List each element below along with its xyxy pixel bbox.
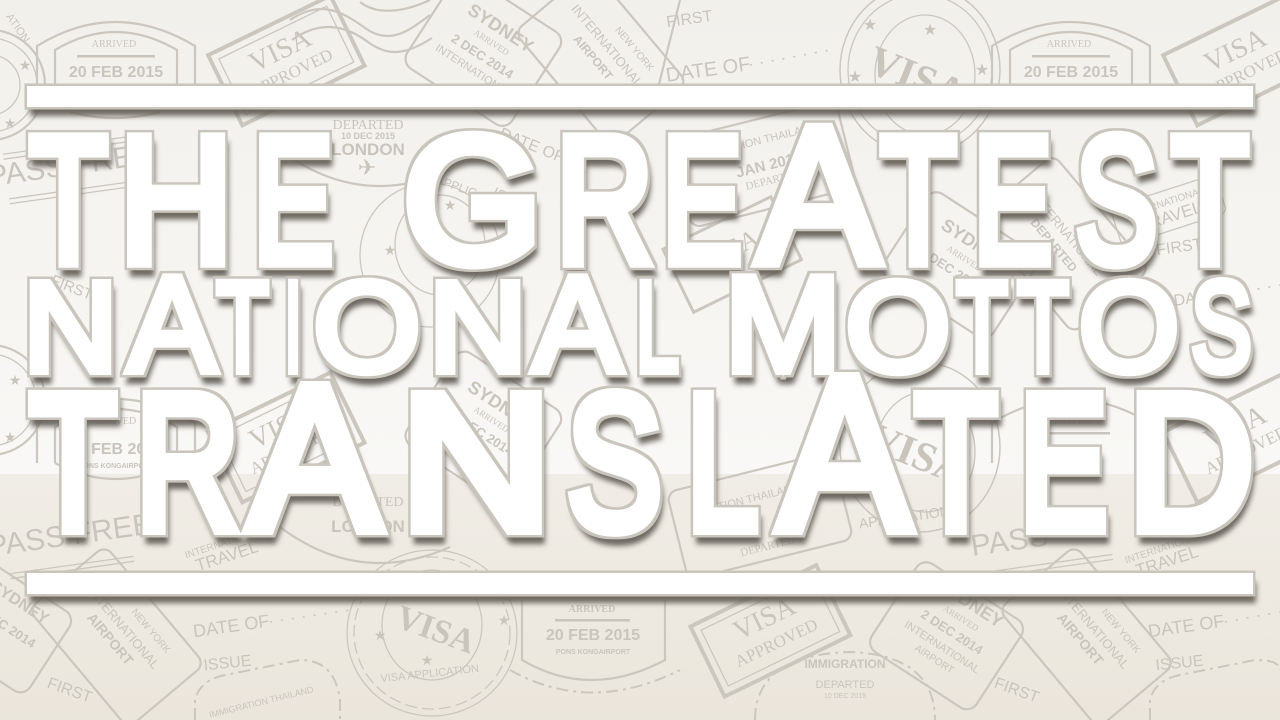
- stamp: visa approved right repeat: VISA: [1199, 399, 1272, 456]
- stamp: lower passport right: [968, 511, 1113, 579]
- stamp: visa approved repeat: APPROVED: [247, 422, 336, 478]
- stamp: international airport: [514, 0, 687, 147]
- title line 1: H: [119, 100, 233, 301]
- stamp: bottom issue left: IMMIGRATION THAILAND: [208, 684, 315, 720]
- stamp: visa round left: ★: [4, 115, 16, 131]
- stamp: arrived 20 Feb: [37, 22, 195, 118]
- stamp: bottom Sydney right: SYDNEY: [934, 575, 1007, 632]
- stamp: arrived repeat: PONS KONGAIRPORT: [79, 463, 154, 470]
- title line 1: [29, 87, 1249, 304]
- stamp: departed London: 10 DEC 2015: [341, 131, 395, 141]
- stamp: visa round middle: ★: [444, 197, 456, 213]
- stamp: bottom arrived: [510, 600, 680, 692]
- title line 2: A: [128, 248, 216, 400]
- stamp: Sydney repeat: 2 DEC 2014: [449, 408, 517, 459]
- title line 1: T: [1171, 100, 1249, 301]
- title line 3: L: [687, 354, 758, 570]
- stamp: departed London: LONDON: [331, 140, 405, 159]
- stamp: visa approved right: VISA: [1199, 22, 1272, 79]
- title line 2: L: [636, 256, 679, 399]
- stamp: immigration Thailand: JAN 2013: [734, 149, 804, 182]
- stamp: bottom airport left: INTERNATIONAL: [85, 583, 163, 672]
- stamp: visa round top: [840, 0, 1000, 155]
- stamp: Sydney: INTERNATIONAL: [433, 42, 513, 100]
- stamp: lower international travel right: INTERNATIONAL: [1124, 531, 1203, 566]
- stamp: international travel: TRAVEL: [1137, 197, 1204, 235]
- title line 2: T: [1017, 256, 1069, 399]
- stamp: date of: FIRST: [665, 8, 714, 31]
- stamp: bottom arrived: PONS KONGAIRPORT: [556, 649, 631, 656]
- stamp: bottom airport right: NEW YORK: [1099, 607, 1142, 656]
- stamp: arrived repeat: [37, 399, 195, 479]
- stamp: bottom date of left: FIRST: [45, 675, 94, 707]
- title line 2: A: [533, 248, 622, 400]
- stamp: bottom date of right: [992, 611, 1280, 707]
- stamp: bottom airport left: AIRPORT: [84, 610, 137, 668]
- stamp: visa round middle: ★: [384, 242, 396, 258]
- stamp: bottom visa round: ★: [498, 612, 510, 628]
- stamp: bottom immigration: IMMIGRATION: [804, 657, 886, 671]
- stamp: bottom date of left: DATE OF: [192, 611, 271, 641]
- stamp: visa round middle: APPLIC: [434, 172, 479, 200]
- stamp: arrived right repeat: ARRIVED: [1047, 416, 1091, 427]
- title line 1: E: [973, 100, 1052, 301]
- stamp: date of and issue: [490, 125, 567, 218]
- stamp: bottom date of right: FIRST: [992, 675, 1041, 707]
- stamp: bottom issue right: ISSUE: [1155, 653, 1204, 674]
- stamp: date of: DATE OF: [664, 53, 752, 87]
- title line 2: I: [284, 256, 302, 399]
- stamp: immigration lower: [667, 451, 853, 580]
- stamp: bottom airport left: [28, 545, 205, 720]
- stamp: visa approved: APPROVED: [247, 45, 336, 101]
- stamp: bottom Sydney right: ARRIVED: [941, 603, 981, 634]
- stamp: Sydney repeat: SYDNEY: [464, 377, 537, 434]
- stamp: bottom Sydney right: 2 DEC 2014: [918, 606, 986, 658]
- stamp: first and date right: FIRST: [1155, 236, 1204, 259]
- stamp: arrived 20 Feb: ARRIVED: [92, 39, 136, 50]
- stamp: bottom immigration: DEPARTED: [816, 679, 874, 691]
- stamp: visa lower-left of row two: [663, 197, 801, 312]
- stamp: visa round left: ATION: [3, 11, 32, 45]
- stamp: bottom arrived: 20 FEB 2015: [546, 627, 640, 644]
- stamp: first and date right: DATE: [1173, 287, 1216, 310]
- stamp: arrived repeat: 20 FEB 2015: [69, 441, 163, 458]
- title line 1: E: [253, 100, 333, 301]
- stamp: bottom visa round: VISA: [391, 599, 481, 662]
- stamp: immigration Thailand: IMMIGRATION THAILAND: [688, 121, 818, 164]
- stamp: bottom date of right: DATE OF: [1147, 611, 1226, 641]
- stamp: arrived right repeat: [992, 399, 1150, 463]
- title line 2: T: [216, 256, 269, 399]
- stamp: arrived right: ARRIVED: [1047, 39, 1091, 50]
- stamp: Sydney repeat: ARRIVED: [472, 404, 511, 435]
- stamp: bottom Sydney right: INTERNATIONAL: [902, 619, 982, 676]
- title line 3: T: [30, 354, 116, 570]
- title block with rules and shadow: [23, 86, 1254, 594]
- stamp: immigration lower: DEPARTED: [739, 534, 796, 559]
- stamp: departed London: [280, 118, 450, 186]
- stamp: lower London: LONDON: [331, 517, 405, 536]
- stamp: date of and issue: ISSUE: [490, 184, 535, 218]
- title line 2: M: [724, 248, 842, 400]
- stamp: visa round top: ★: [863, 17, 877, 34]
- stamp: Sydney: ARRIVED: [472, 27, 511, 58]
- stamp: bottom visa round: VISA APPLICATION: [380, 663, 480, 685]
- stamp: lower international travel right: [1124, 531, 1208, 582]
- stamp: first left row three: ★: [4, 429, 16, 445]
- stamp: Sydney: [401, 0, 566, 130]
- stamp: date of and issue: DATE OF: [497, 125, 567, 167]
- title line 3: R: [136, 354, 239, 570]
- stamp: visa round repeat: [840, 362, 1000, 532]
- stamp: lower international travel right: TRAVEL: [1133, 542, 1201, 580]
- stamp: international travel: [1110, 174, 1227, 246]
- stamp: departed London: DEPARTED: [333, 118, 403, 133]
- stamp: arrived right: [992, 22, 1150, 86]
- title line 3: S: [567, 354, 662, 570]
- stamp: visa approved right: [1163, 0, 1280, 125]
- bottom rule: [27, 573, 1253, 594]
- stamp: visa approved: [208, 0, 365, 125]
- title line 3: A: [779, 332, 910, 576]
- stamp: international airport mid: INTERNATIONAL: [1028, 190, 1106, 278]
- stamp: international airport: INTERNATIONAL: [568, 1, 646, 90]
- stamp: immigration Thailand: DEPARTED: [744, 168, 801, 193]
- title line 2: O: [846, 256, 950, 399]
- title line 3: N: [401, 354, 552, 570]
- stamp: bottom visa round: [347, 550, 517, 716]
- top rule: [27, 86, 1253, 107]
- stamp: lower London: DEPARTED: [333, 495, 403, 510]
- stamp: visa round middle: [360, 172, 500, 327]
- stamp: bottom issue left: ISSUE: [203, 653, 252, 674]
- stamp: Sydney mid: DEC 2014: [926, 250, 985, 295]
- stamp: international airport mid: DEPARTED: [1028, 216, 1080, 275]
- stamp: departed London: ✈: [358, 155, 376, 180]
- stamp: visa round repeat: VISA: [862, 415, 973, 495]
- stamp: visa approved right repeat: [1163, 373, 1280, 502]
- stamp: visa approved: VISA: [244, 22, 317, 79]
- background: upper paper panel: [0, 0, 1280, 474]
- stamp: arrived repeat: ARRIVED: [92, 416, 136, 427]
- stamp: lower London: [280, 495, 450, 563]
- stamp: Sydney: 2 DEC 2014: [449, 31, 517, 82]
- stamp: Sydney: SYDNEY: [464, 0, 537, 57]
- stamp: bottom immigration: 10 DEC 2015: [824, 693, 866, 700]
- stamp: Sydney repeat: [401, 347, 566, 507]
- title line 2: T: [956, 256, 1008, 399]
- stamp: bottom Sydney right: AIRPORT: [912, 643, 955, 676]
- stamp: arrived right: 20 FEB 2015: [1024, 64, 1118, 81]
- title line 3: E: [1020, 354, 1107, 570]
- stamp: first left row three: FIRST: [48, 272, 95, 304]
- stamp: bottom visa approved: VISA: [728, 590, 801, 647]
- title line 1: E: [662, 100, 742, 301]
- title line 2: [23, 248, 1252, 400]
- stamp: bottom date of left: [45, 610, 350, 707]
- title line 3: A: [249, 344, 380, 572]
- stamp: bottom immigration: [755, 652, 935, 720]
- stamp: date of: [655, 0, 830, 100]
- stamp: bottom Sydney left: [0, 552, 76, 697]
- title line 2: O: [313, 256, 421, 399]
- cancellation waves: [290, 0, 432, 52]
- stamp: visa round top: ★: [975, 62, 989, 79]
- stamp: visa round left: ★: [19, 57, 31, 73]
- stamp: bottom airport right: INTERNATIONAL: [1055, 583, 1133, 672]
- title line 1: A: [758, 87, 880, 304]
- title line 1: G: [403, 100, 542, 301]
- stamp: international travel: INTERNATIONAL: [1127, 186, 1206, 221]
- stamp: bottom visa round: ★: [374, 627, 386, 643]
- title line 3: D: [1128, 354, 1254, 570]
- stamp: arrived 20 Feb: 20 FEB 2015: [69, 64, 163, 81]
- title line 1: S: [1075, 100, 1158, 301]
- title line 2: S: [1191, 256, 1252, 399]
- stamp: bottom Sydney right: [866, 558, 1028, 714]
- stamp: lower international travel left: [184, 526, 268, 577]
- stamp: lower international travel left: TRAVEL: [193, 537, 261, 575]
- stamp: visa round top: VISA: [862, 38, 973, 118]
- stamp: bottom airport left: NEW YORK: [129, 607, 172, 656]
- stamp: visa round left: [0, 11, 45, 140]
- stamp: bottom issue left: [195, 653, 340, 720]
- stamp: visa round top: ★: [923, 22, 937, 39]
- stamp: visa approved repeat: VISA: [244, 399, 317, 456]
- stamp: visa approved repeat: [208, 373, 365, 502]
- stamp: bottom visa approved: [690, 565, 850, 697]
- stamp: international airport: NEW YORK: [612, 25, 656, 74]
- stamp: immigration Thailand: [670, 100, 857, 228]
- stamp: first left row three: [0, 272, 95, 455]
- stamp: Sydney mid: SYDNEY: [938, 215, 1011, 272]
- stamp: international airport mid: [977, 154, 1150, 333]
- stamp: bottom issue right: [1150, 653, 1280, 720]
- title line 2: N: [429, 256, 527, 399]
- stamp: visa round top: ★: [848, 69, 862, 86]
- title line 2: N: [23, 256, 118, 399]
- stamp: visa round repeat: APPLICATION: [858, 503, 951, 531]
- stamp: international airport: AIRPORT: [570, 32, 616, 83]
- stamp: Sydney mid: [878, 188, 1042, 342]
- stamp: first left row three: ★: [9, 372, 21, 388]
- stamp: bottom visa approved: APPROVED: [732, 615, 821, 671]
- stamp: immigration lower: ATION THAILAND: [710, 481, 801, 515]
- stamp: visa lower-left of row two: VISA: [696, 223, 764, 276]
- stamp: lower international travel left: INTERNATIONAL: [184, 526, 263, 561]
- stamp: lower passport right: PASS: [969, 519, 1050, 563]
- stamp: first and date right: [1155, 236, 1280, 310]
- title line 3: [30, 332, 1254, 576]
- title line 2: O: [1079, 256, 1179, 399]
- stamp: bottom visa round: ★: [421, 652, 433, 668]
- title line 1: R: [556, 100, 653, 301]
- stamp: bottom arrived: ARRIVED: [569, 604, 615, 615]
- stamp: bottom airport right: AIRPORT: [1054, 610, 1107, 668]
- stamp: bottom airport right: [998, 545, 1175, 720]
- background: lower paper panel: [0, 474, 1280, 720]
- title line 1: T: [880, 100, 956, 301]
- stamp: Sydney mid: ARRIVED: [945, 243, 984, 274]
- title line 3: T: [915, 354, 997, 570]
- title line 1: T: [29, 100, 108, 301]
